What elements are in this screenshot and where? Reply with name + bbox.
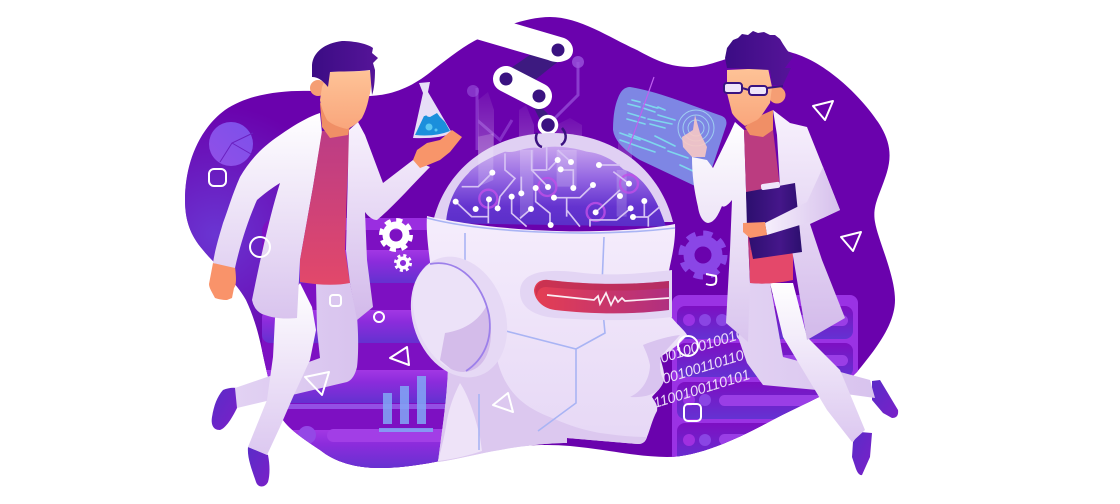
icon: triangle 1 (390, 347, 409, 365)
clipboard clip (761, 182, 780, 190)
icon: holographic panel (613, 77, 726, 187)
face seams (427, 218, 675, 450)
coat right panel (773, 110, 845, 340)
icon: white gear (382, 220, 410, 250)
icon: rounded square 1 (209, 169, 226, 186)
icon: triangle 4 (813, 101, 833, 120)
robot head (395, 128, 687, 462)
binary text: 00100010010 (658, 326, 746, 367)
hook claw (536, 128, 566, 147)
icon: triangle 3 (493, 393, 513, 412)
icon: pie chart (209, 122, 253, 166)
brain dome ring (433, 133, 673, 222)
coat right panel with sleeve (346, 122, 430, 320)
brain and circuit (446, 133, 666, 228)
icon: small white gear (396, 256, 410, 270)
icon: rounded square 4 (706, 274, 716, 285)
visor (520, 270, 672, 320)
sleeve over clipboard (765, 167, 840, 235)
icon: triangle 2 (305, 372, 329, 395)
bar chart (379, 376, 433, 432)
arm lower link (506, 79, 539, 96)
back leg (235, 283, 358, 408)
clipboard hand (743, 222, 767, 238)
nose and lip shadow (630, 335, 680, 397)
arm upper white link (476, 23, 573, 62)
icon: circle 3 (678, 336, 698, 356)
icon: rounded square 2 (330, 295, 341, 306)
hair (312, 41, 378, 95)
jaw and neck shadow (438, 330, 647, 462)
floating white outlines (209, 101, 861, 421)
head shape (420, 216, 687, 462)
ear (768, 86, 786, 104)
icon: circle 2 (374, 312, 384, 322)
binary text: 00100110110 (660, 348, 746, 388)
icon: purple gear (682, 234, 724, 276)
shoes (212, 388, 237, 430)
icon: circle 1 (250, 237, 270, 257)
robot arm (476, 23, 573, 134)
flask (413, 82, 452, 138)
scientist left (209, 41, 462, 486)
left hand (209, 263, 236, 300)
binary text: 1100100110101 (651, 367, 752, 412)
coat left panel (213, 113, 322, 319)
neck (320, 103, 350, 138)
face (727, 68, 772, 126)
front leg (248, 283, 316, 455)
arm end joint (540, 116, 556, 134)
front leg (770, 283, 865, 442)
holding hand (413, 130, 462, 168)
clipboard (746, 183, 802, 259)
hair (725, 31, 793, 85)
icon: triangle 5 (841, 232, 861, 251)
neck highlight (438, 383, 482, 461)
arm dark joint (508, 50, 560, 80)
ear (410, 256, 508, 378)
shirt (300, 130, 350, 285)
striped server rows, left (262, 218, 458, 470)
back leg (738, 283, 875, 398)
scientist right (682, 31, 898, 475)
shoes (872, 380, 898, 418)
icon: rounded square 3 (684, 404, 701, 421)
face (320, 70, 372, 129)
glasses (724, 83, 783, 95)
binary text (654, 330, 750, 408)
ghost circuit and skyline strips (467, 56, 632, 215)
raised hand (682, 115, 707, 157)
background blob (185, 17, 895, 468)
neck (745, 110, 773, 137)
coat lower and sleeve (692, 122, 750, 342)
shirt (744, 130, 793, 284)
panel: server rack, right (672, 295, 858, 470)
ear (310, 80, 326, 96)
